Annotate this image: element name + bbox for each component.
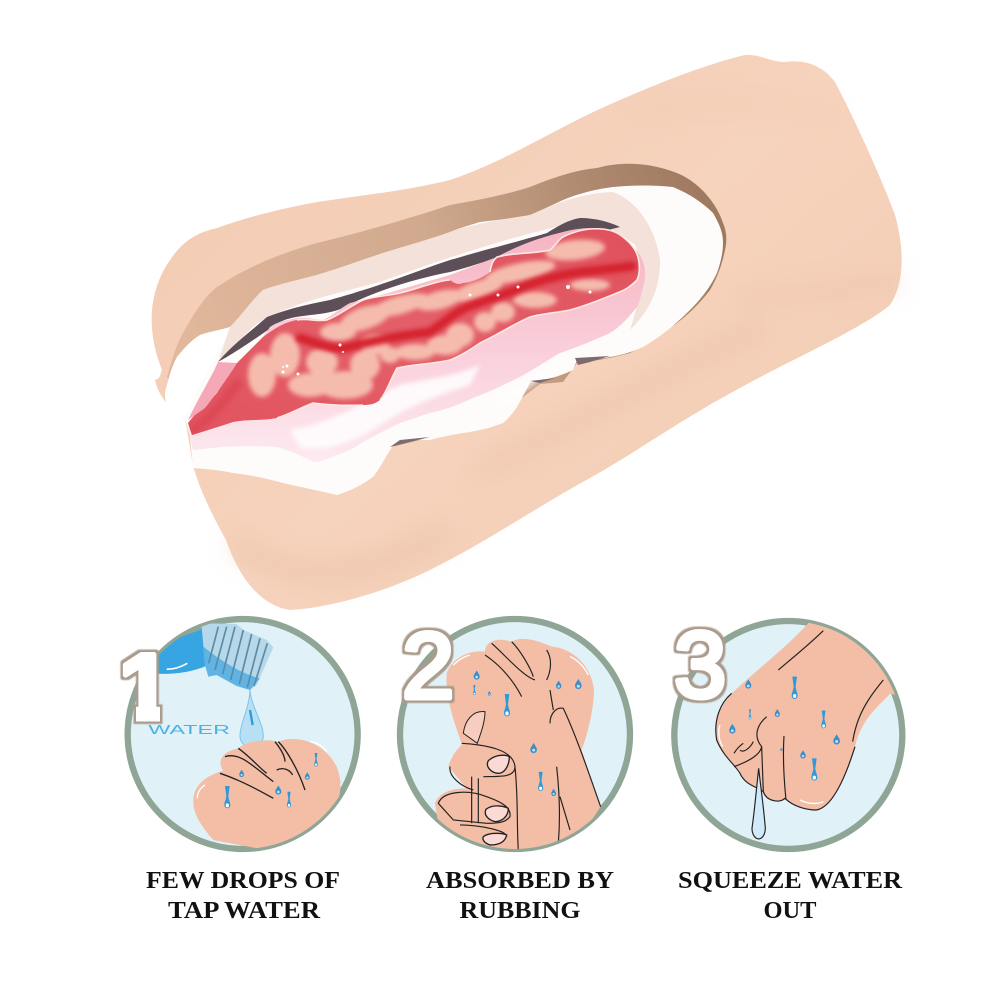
- number 2: 2: [402, 613, 454, 718]
- body shading: [240, 104, 895, 573]
- label 1 line 2: TAP WATER: [168, 898, 321, 924]
- panel 3: squeeze water out: [674, 617, 920, 849]
- lip shadow: [188, 362, 237, 420]
- hand and product: [435, 639, 601, 853]
- water droplets: [224, 753, 318, 808]
- dark gap: [218, 218, 620, 362]
- upper beige fold: [218, 192, 660, 362]
- left lip fold: [165, 327, 230, 418]
- label 3 line 2: OUT: [764, 898, 816, 924]
- panel 2: absorbed by rubbing: [400, 619, 630, 853]
- product body: [152, 55, 902, 610]
- white outer layer: [165, 186, 723, 495]
- circle background: [674, 621, 902, 849]
- product illustration: [152, 55, 902, 610]
- water droplets: [473, 670, 582, 796]
- bottle label: WATER: [148, 722, 230, 737]
- falling water drop: [240, 690, 263, 748]
- circle background: [400, 619, 630, 849]
- deep red channel: [300, 266, 632, 348]
- lighter tone at tail: [190, 380, 240, 432]
- label 2 line 2: RUBBING: [460, 898, 581, 924]
- hand and product: [715, 622, 895, 811]
- panel 1: few drops of tap water: [128, 619, 358, 853]
- hand and product: [193, 739, 340, 853]
- water droplets: [729, 677, 840, 781]
- lower gaps: [390, 356, 610, 447]
- number 1: 1: [119, 634, 171, 739]
- pale flesh folds: [248, 237, 610, 399]
- water bottle: [150, 623, 273, 690]
- number 3: 3: [674, 612, 726, 717]
- circle background: [128, 619, 358, 849]
- label 3: SQUEEZE WATER: [678, 868, 903, 894]
- label 2: ABSORBED BY: [426, 868, 614, 894]
- squeezed water stream: [752, 768, 765, 839]
- red interior: [180, 220, 650, 440]
- red interior rim: [277, 229, 639, 418]
- cavity opening: [167, 164, 726, 470]
- label 1: FEW DROPS OF: [146, 868, 340, 894]
- pink inner wall: [188, 228, 645, 462]
- sparkles: [282, 285, 592, 376]
- pink wall highlights: [290, 348, 585, 449]
